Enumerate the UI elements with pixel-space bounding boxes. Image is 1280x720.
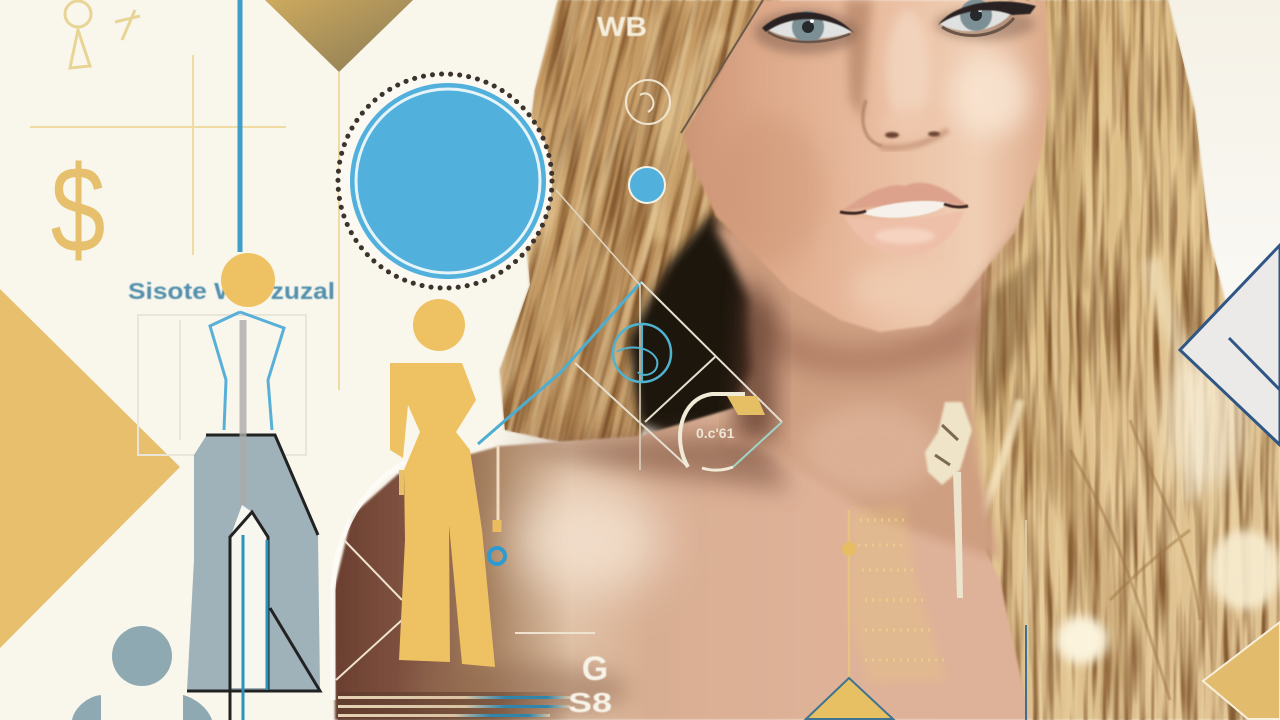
hair front lock edge xyxy=(681,0,763,133)
face xyxy=(683,0,1050,332)
shoulder thin lines xyxy=(336,540,595,680)
left figure grey trousers xyxy=(187,320,320,720)
garbled bottom label: G xyxy=(582,650,608,688)
bottom-left grey circle xyxy=(112,626,172,686)
chest and shoulders xyxy=(334,400,1030,720)
bottom stripes xyxy=(338,692,570,720)
left big gold diamond xyxy=(0,289,180,648)
bottom-right gold diamond xyxy=(1203,622,1280,719)
left figure torso outline xyxy=(210,312,284,430)
small blue circle xyxy=(629,167,665,203)
bottom centre gold triangle xyxy=(806,678,893,719)
left figure outline box xyxy=(138,315,306,455)
left hair mass xyxy=(498,0,780,442)
garbled top label: WB xyxy=(597,11,647,42)
garbled bottom label: S8 xyxy=(568,687,612,718)
bottom-left grey half shapes xyxy=(72,695,212,720)
icon: nose xyxy=(863,100,948,148)
gauge arc xyxy=(680,394,745,467)
white halo around shoulder xyxy=(333,462,405,700)
panel: portrait photo xyxy=(334,0,1280,720)
dark hair shadow xyxy=(628,212,770,445)
icon: dollar ring xyxy=(613,324,671,382)
right outlined diamond xyxy=(1180,245,1280,445)
string with beads xyxy=(489,445,505,564)
diamond diagram xyxy=(556,190,782,470)
icon: lips xyxy=(840,183,968,255)
top gold triangle xyxy=(265,0,413,72)
garbled bottom label xyxy=(568,650,612,718)
nose bridge shadow xyxy=(845,0,872,120)
neck xyxy=(715,225,1000,560)
blue circle with dotted ring xyxy=(338,74,552,288)
right vertical line xyxy=(1025,520,1027,720)
blue diagonal line xyxy=(478,282,641,444)
blue vertical line xyxy=(238,0,242,252)
blurred heading label: Sisote Wi Vzuzal xyxy=(128,278,335,304)
thin grid lines top left xyxy=(30,55,339,390)
right hair mass xyxy=(960,0,1280,720)
icon: top-left sketch xyxy=(65,1,140,68)
icon: earring xyxy=(925,402,972,598)
small ring icon xyxy=(626,80,670,124)
icon: right eye xyxy=(935,0,1036,40)
gauge value: 0.c'61 xyxy=(696,425,735,441)
centre gold figure xyxy=(390,299,495,667)
left figure head xyxy=(221,253,275,307)
dollar sign left: $ xyxy=(51,140,105,279)
chest gold speckle xyxy=(842,505,945,682)
icon: left eye xyxy=(754,10,858,54)
